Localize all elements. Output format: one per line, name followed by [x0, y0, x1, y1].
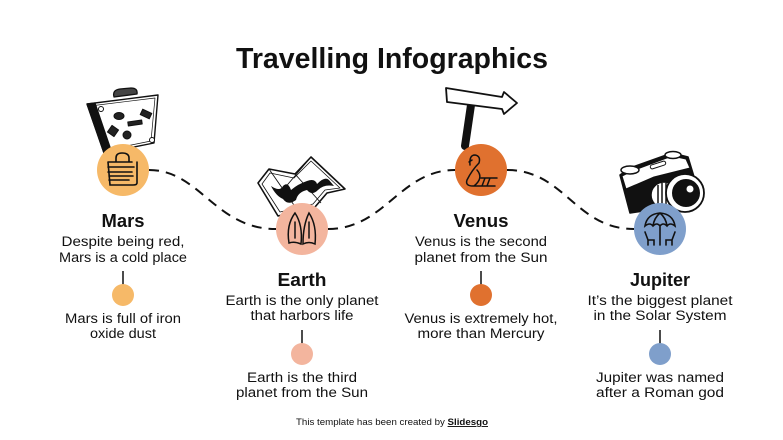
- Earth note: planet from the Sun: [236, 385, 368, 400]
- Earth circle: [276, 203, 328, 255]
- icon: camera: [620, 152, 704, 213]
- Venus note: [404, 311, 558, 341]
- Venus note: Venus is extremely hot,: [404, 311, 558, 326]
- Earth dot: [291, 343, 313, 365]
- Mars note: oxide dust: [90, 326, 156, 341]
- Mars description: [59, 234, 187, 265]
- Mars description: Mars is a cold place: [59, 250, 187, 265]
- Jupiter heading: Jupiter: [630, 270, 690, 290]
- Jupiter description: [588, 293, 733, 323]
- Earth description: [226, 293, 379, 323]
- Earth description: Earth is the only planet: [226, 293, 379, 308]
- Earth heading: Earth: [278, 270, 326, 290]
- Jupiter circle: [634, 203, 686, 255]
- Venus circle: [455, 144, 507, 196]
- panel: Jupiter: [588, 152, 733, 400]
- dashed route: [149, 170, 634, 229]
- Venus description: planet from the Sun: [414, 250, 548, 265]
- Earth note: [236, 370, 368, 400]
- footer credit: This template has been created by Slidesgo: [296, 417, 488, 428]
- Venus note: more than Mercury: [418, 326, 545, 341]
- Venus description: Venus is the second: [415, 234, 547, 249]
- icon: beach umbrella: [645, 213, 675, 245]
- panel: Venus: [404, 88, 558, 341]
- icon: tents: [288, 213, 315, 244]
- panel: Mars: [59, 88, 187, 341]
- Jupiter note: after a Roman god: [596, 385, 724, 400]
- panel: Earth: [226, 157, 379, 400]
- Mars note: Mars is full of iron: [65, 311, 181, 326]
- icon: folded map: [258, 157, 345, 216]
- icon: suitcase: [87, 88, 158, 153]
- connector: [122, 271, 124, 285]
- connector: [480, 271, 482, 285]
- Mars circle: [97, 144, 149, 196]
- Mars description: Despite being red,: [62, 234, 184, 249]
- icon: bag: [108, 153, 137, 185]
- icon: signpost arrow: [446, 88, 517, 146]
- Jupiter description: It’s the biggest planet: [588, 293, 733, 308]
- connector: [301, 330, 303, 344]
- Earth description: that harbors life: [250, 308, 354, 323]
- icon: swan float: [467, 155, 497, 186]
- Earth note: Earth is the third: [247, 370, 357, 385]
- Jupiter note: [596, 370, 724, 400]
- Jupiter note: Jupiter was named: [596, 370, 724, 385]
- Venus dot: [470, 284, 492, 306]
- Jupiter description: in the Solar System: [594, 308, 726, 323]
- Venus heading: Venus: [454, 211, 508, 231]
- connector: [659, 330, 661, 344]
- Mars dot: [112, 284, 134, 306]
- Mars note: [65, 311, 181, 341]
- Venus description: [414, 234, 548, 265]
- title: Travelling Infographics: [236, 43, 548, 75]
- Mars heading: Mars: [102, 211, 144, 231]
- Jupiter dot: [649, 343, 671, 365]
